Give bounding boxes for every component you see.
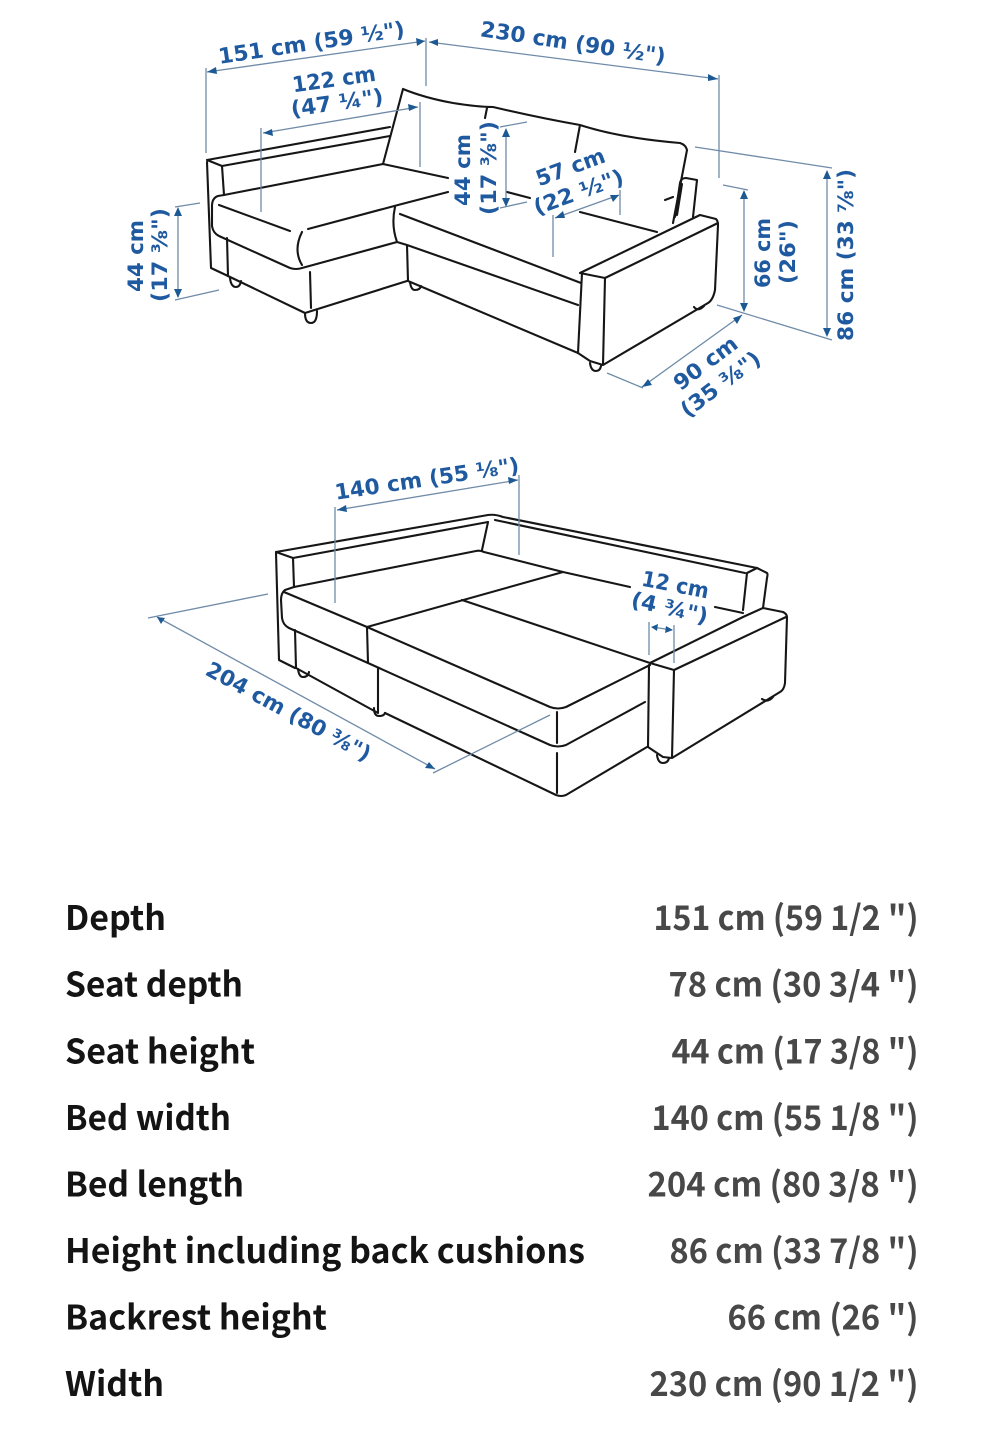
row: backrest height: 66 cm (26 ") — [728, 1290, 918, 1340]
dimension arrowheads: bed mode — [157, 477, 673, 769]
label: 86 cm: 86 cm (33 ⅞") — [834, 169, 859, 341]
row: backrest height — [65, 1290, 918, 1340]
row: depth: 151 cm (59 1/2 ") — [654, 891, 918, 940]
label: left 44 cm: 44 cm — [124, 220, 149, 292]
row: bed width: 140 cm (55 1/8 ") — [652, 1091, 918, 1140]
row: seat height: Seat height — [65, 1024, 255, 1074]
label: width 230 cm: 230 cm (90 ½") — [479, 17, 667, 70]
label: bed width 140 cm: 140 cm (55 ⅛") — [333, 453, 521, 506]
row: height including back cushions: Height including back cushions — [65, 1224, 585, 1273]
label: left 17 3/8 in: (17 ⅜") — [148, 208, 173, 302]
label: 12 cm: 12 cm — [639, 567, 711, 604]
row: width — [65, 1357, 918, 1406]
label: 122 cm: 122 cm — [291, 62, 377, 98]
label: 26 in: (26") — [776, 220, 801, 284]
label: depth 151 cm: 151 cm (59 ½") — [217, 17, 406, 70]
row: seat depth — [65, 958, 918, 1006]
row: depth — [65, 891, 918, 940]
label: 4 3/4 in: (4 ¾") — [629, 588, 710, 630]
row: height including back cushions: 86 cm (33 7/8 ") — [670, 1224, 918, 1273]
diagram: sofa in bed configuration — [148, 453, 787, 796]
row: bed width: Bed width — [65, 1091, 231, 1140]
row: bed length — [65, 1158, 918, 1206]
row: seat depth: 78 cm (30 3/4 ") — [668, 958, 918, 1006]
label: middle 17 3/8 in: (17 ⅜") — [477, 121, 502, 215]
row: seat height — [65, 1024, 918, 1074]
row: width: Width — [65, 1357, 164, 1406]
table: measurements — [65, 891, 918, 1406]
row: height including back cushions — [65, 1224, 918, 1273]
sofa line drawing: bed mode — [276, 515, 787, 796]
label: middle 44 cm: 44 cm — [451, 134, 476, 206]
dimension arrowheads: seating mode — [174, 38, 831, 387]
row: seat height: 44 cm (17 3/8 ") — [672, 1024, 918, 1074]
label: 47 1/4 in: (47 ¼") — [289, 85, 385, 122]
label: 22 1/2 in: (22 ½") — [530, 165, 627, 221]
diagram: sofa in seating configuration — [124, 17, 859, 423]
label: 35 3/8 in: (35 ⅜") — [676, 347, 766, 423]
label: 90 cm: 90 cm — [669, 332, 743, 396]
dimension lines: bed mode — [148, 475, 674, 773]
row: bed length: 204 cm (80 3/8 ") — [648, 1158, 918, 1206]
row: seat depth: Seat depth — [65, 958, 243, 1006]
label: bed length 204 cm: 204 cm (80 ⅜") — [201, 657, 375, 767]
label: 66 cm: 66 cm — [751, 218, 776, 288]
row: depth: Depth — [65, 891, 166, 940]
row: bed width — [65, 1091, 918, 1140]
dimension lines: seating mode — [175, 38, 832, 388]
label: 57 cm: 57 cm — [533, 144, 609, 192]
sofa line drawing: seating mode — [207, 89, 718, 371]
row: bed length: Bed length — [65, 1158, 244, 1206]
row: width: 230 cm (90 1/2 ") — [650, 1357, 918, 1406]
row: backrest height: Backrest height — [65, 1290, 327, 1340]
